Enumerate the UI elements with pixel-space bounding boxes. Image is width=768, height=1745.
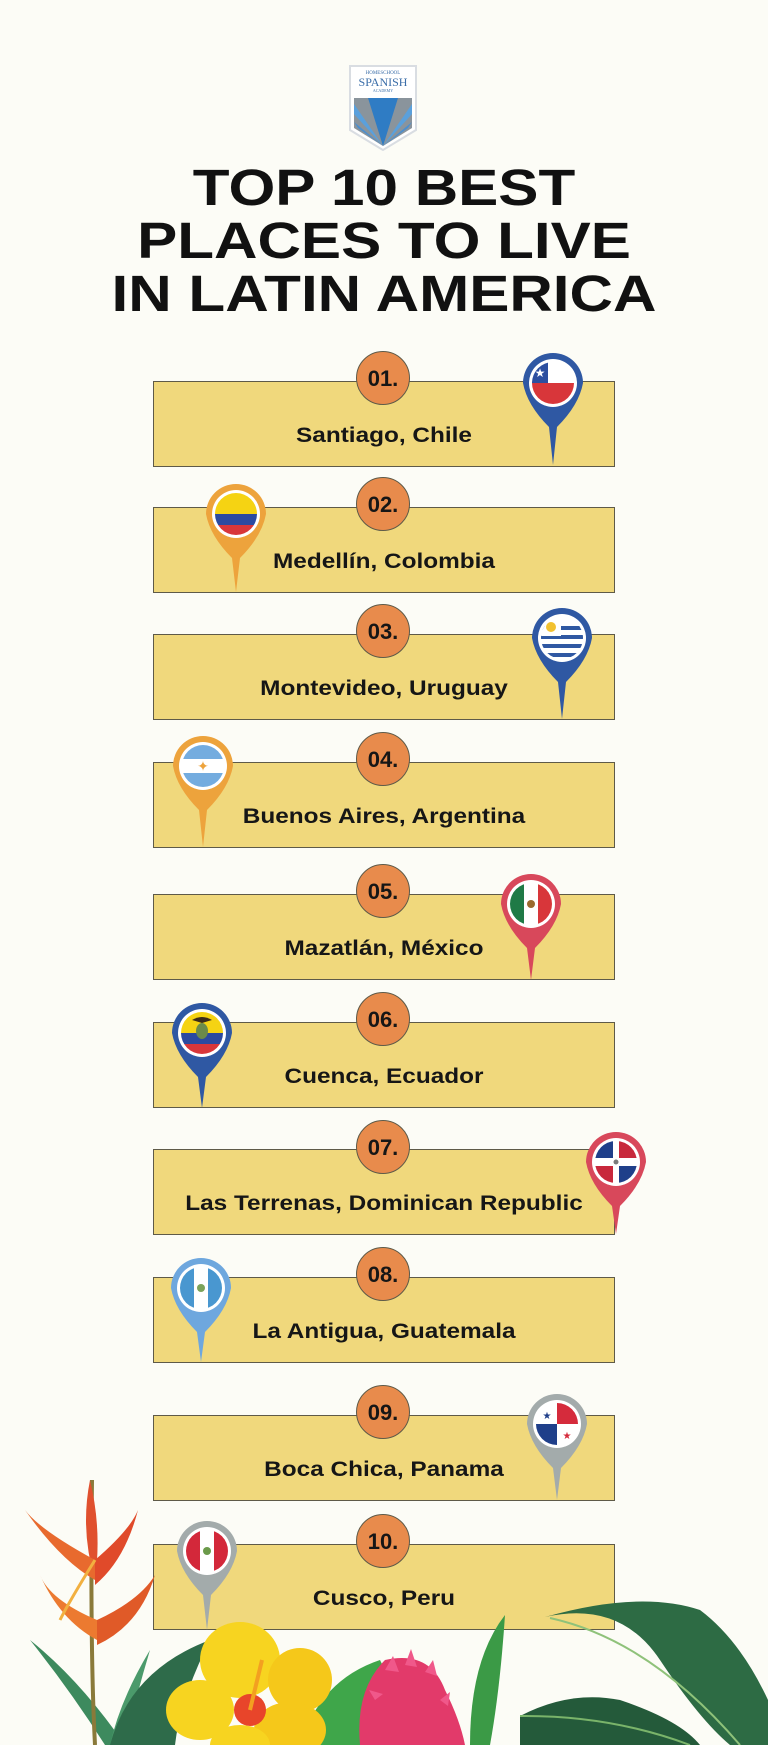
logo: SPANISH bbox=[359, 75, 408, 89]
badge 03 bbox=[356, 604, 410, 658]
row 10 bbox=[153, 1544, 615, 1630]
title bbox=[112, 159, 656, 322]
pin: Panama: ★ bbox=[543, 1411, 552, 1422]
pin: Peru bbox=[177, 1521, 237, 1630]
badge 06 bbox=[356, 992, 410, 1046]
row 2: Medellín, Colombia bbox=[273, 550, 495, 573]
row 3: Montevideo, Uruguay bbox=[260, 677, 508, 700]
badge 08 bbox=[356, 1247, 410, 1301]
plant: heliconia left bbox=[25, 1480, 155, 1745]
row 4 bbox=[153, 762, 615, 848]
badge 09 bbox=[356, 1385, 410, 1439]
row 1: Santiago, Chile bbox=[296, 424, 472, 447]
plant: dark leaf bbox=[110, 1640, 393, 1745]
row 2 bbox=[153, 507, 615, 593]
row 6: Cuenca, Ecuador bbox=[284, 1065, 484, 1088]
badge 01 bbox=[356, 351, 410, 405]
row 7: Las Terrenas, Dominican Republic bbox=[185, 1192, 583, 1215]
pin: Dominican Republic bbox=[586, 1132, 646, 1234]
plant: yellow hibiscus bbox=[166, 1622, 332, 1745]
logo bbox=[349, 65, 417, 151]
pin: Panama: ★ bbox=[563, 1431, 572, 1442]
badge 09: 09. bbox=[368, 1400, 398, 1425]
logo: ACADEMY bbox=[373, 88, 393, 93]
badge 01: 01. bbox=[368, 366, 398, 391]
badge 02: 02. bbox=[368, 492, 398, 517]
badge 07 bbox=[356, 1120, 410, 1174]
row 9 bbox=[153, 1415, 615, 1501]
overlay: pins and plants bbox=[25, 353, 768, 1745]
pin: Argentina: ✦ bbox=[197, 758, 209, 774]
badge 06: 06. bbox=[368, 1007, 398, 1032]
pin: Ecuador bbox=[172, 1003, 232, 1108]
badge 07: 07. bbox=[368, 1135, 398, 1160]
badge 04: 04. bbox=[368, 747, 398, 772]
badge 04 bbox=[356, 732, 410, 786]
badge 05: 05. bbox=[368, 879, 398, 904]
badge 10 bbox=[356, 1514, 410, 1568]
row 8: La Antigua, Guatemala bbox=[252, 1320, 516, 1343]
row 3 bbox=[153, 634, 615, 720]
pin: Chile bbox=[523, 353, 583, 465]
badge 10: 10. bbox=[368, 1529, 398, 1554]
logo: HOMESCHOOL bbox=[366, 71, 400, 76]
pin: Colombia bbox=[206, 484, 266, 592]
pin: Mexico bbox=[501, 874, 561, 980]
plant: big leaves right bbox=[520, 1601, 768, 1745]
title: TOP 10 BEST bbox=[193, 159, 575, 216]
pin: Guatemala bbox=[171, 1258, 231, 1362]
pin: Panama bbox=[527, 1394, 587, 1500]
row 6 bbox=[153, 1022, 615, 1108]
row 5 bbox=[153, 894, 615, 980]
row 4: Buenos Aires, Argentina bbox=[243, 805, 525, 828]
pin: Uruguay bbox=[532, 608, 592, 719]
pin: Chile: ★ bbox=[535, 366, 545, 380]
row 9: Boca Chica, Panama bbox=[264, 1458, 504, 1481]
badge 08: 08. bbox=[368, 1262, 398, 1287]
plant: pink ginger bbox=[359, 1615, 505, 1745]
badge 03: 03. bbox=[368, 619, 398, 644]
title: IN LATIN AMERICA bbox=[112, 265, 656, 322]
row 7 bbox=[153, 1149, 615, 1235]
badge 02 bbox=[356, 477, 410, 531]
row 8 bbox=[153, 1277, 615, 1363]
row 10: Cusco, Peru bbox=[313, 1587, 455, 1610]
pin: Argentina bbox=[173, 736, 233, 847]
row 1 bbox=[153, 381, 615, 467]
badge 05 bbox=[356, 864, 410, 918]
row 5: Mazatlán, México bbox=[284, 937, 484, 960]
title: PLACES TO LIVE bbox=[137, 212, 631, 269]
